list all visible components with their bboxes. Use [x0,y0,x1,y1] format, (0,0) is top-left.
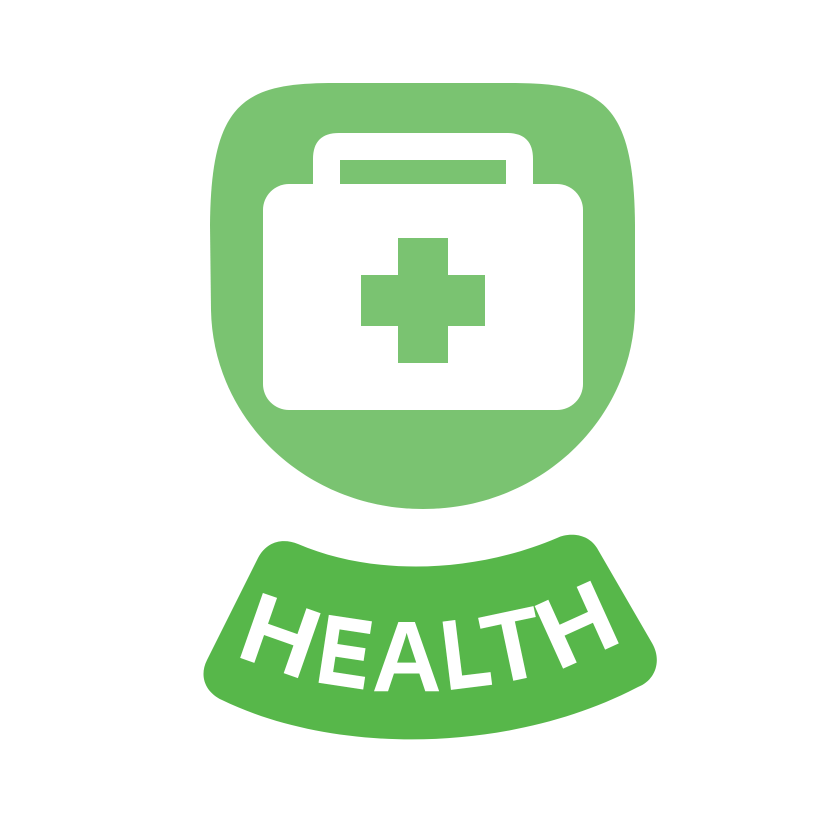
banner text: HEALTH: L [436,596,496,710]
icon: first aid kit [263,133,583,410]
banner text: HEALTH: E [311,594,379,710]
banner text: HEALTH: T [472,584,553,706]
banner text: HEALTH: H [520,558,634,691]
panel: shield [210,83,635,509]
banner text: HEALTH [226,558,634,712]
banner: curved ribbon [203,535,657,739]
banner text: HEALTH: H [226,570,334,701]
icon: medical cross [361,238,485,363]
kit handle [313,133,533,190]
banner text: HEALTH: A [372,601,442,712]
kit body [263,184,583,410]
